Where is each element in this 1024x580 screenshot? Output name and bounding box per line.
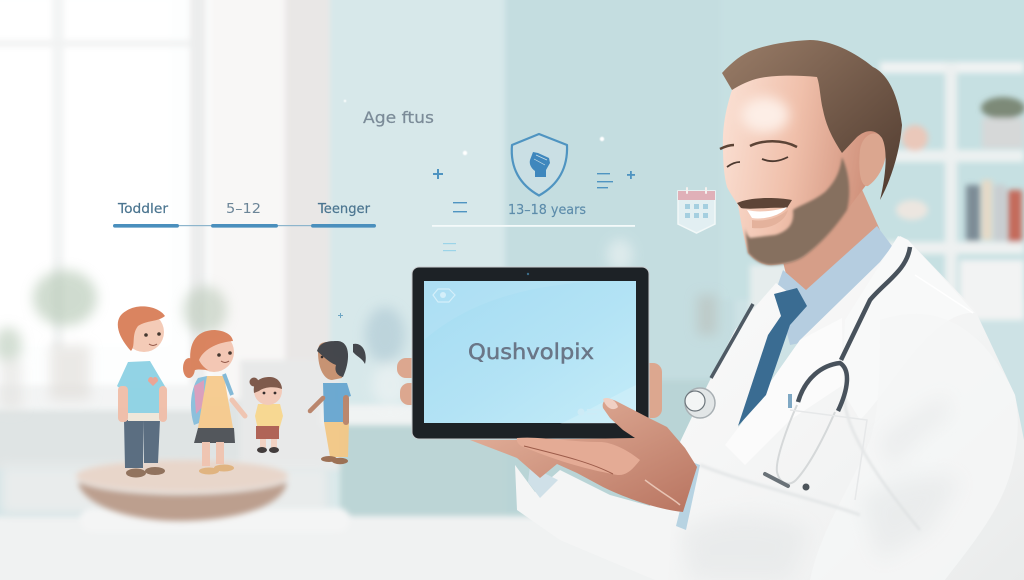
child: older girl facing left bbox=[310, 341, 366, 464]
ear bbox=[859, 133, 886, 186]
beard bbox=[745, 157, 849, 265]
coat fold shading bbox=[680, 395, 960, 580]
forehead highlight bbox=[741, 97, 789, 133]
heading: age ftus: Age ftus bbox=[363, 108, 434, 127]
hand behind tablet bbox=[397, 358, 662, 418]
eyes and brows bbox=[720, 145, 734, 149]
lab coat bbox=[650, 236, 1024, 580]
shirt collar bbox=[776, 226, 895, 345]
shirt cuff left bbox=[528, 466, 558, 498]
neck bbox=[783, 185, 880, 300]
hair bbox=[722, 40, 902, 200]
label: toddler: Toddler bbox=[117, 202, 169, 217]
tablet bbox=[412, 267, 649, 439]
face bbox=[723, 70, 880, 265]
tablet brand name: Qushvolpix bbox=[468, 340, 594, 364]
coat pocket and pen bbox=[790, 410, 867, 500]
screen footer mark bbox=[578, 408, 604, 416]
child: boy bbox=[117, 306, 167, 478]
teeth bbox=[747, 207, 787, 218]
left sleeve bbox=[515, 465, 672, 580]
tie bbox=[738, 288, 807, 426]
icon: calendar badge bbox=[678, 187, 715, 233]
divider line bbox=[432, 225, 635, 227]
label: teenager: Teenger bbox=[317, 202, 371, 217]
moustache bbox=[737, 198, 792, 209]
child: girl with backpack bbox=[183, 330, 245, 474]
background plants bbox=[0, 239, 717, 410]
label: 5-12: 5–12 bbox=[226, 202, 261, 217]
timeline bars bbox=[113, 224, 376, 228]
child: toddler bbox=[250, 377, 283, 453]
background shelves bbox=[750, 62, 1024, 325]
chin bbox=[752, 210, 788, 228]
stethoscope bbox=[685, 247, 910, 490]
decorative plus and dash marks bbox=[338, 169, 635, 318]
sparkles and small plus marks bbox=[344, 100, 604, 155]
label: 13-18 years: 13–18 years bbox=[508, 203, 586, 218]
icon: shield with fist bbox=[512, 134, 567, 196]
foreground table bbox=[0, 516, 670, 580]
pedestal under children bbox=[76, 460, 288, 521]
screen logo bbox=[433, 289, 455, 302]
children illustration bbox=[117, 306, 366, 478]
doctor head bbox=[720, 40, 902, 265]
doctor hands holding tablet bbox=[470, 398, 697, 512]
age band timeline bbox=[113, 202, 376, 228]
doctor bbox=[515, 185, 1024, 580]
sleeve cuff bbox=[676, 462, 700, 530]
